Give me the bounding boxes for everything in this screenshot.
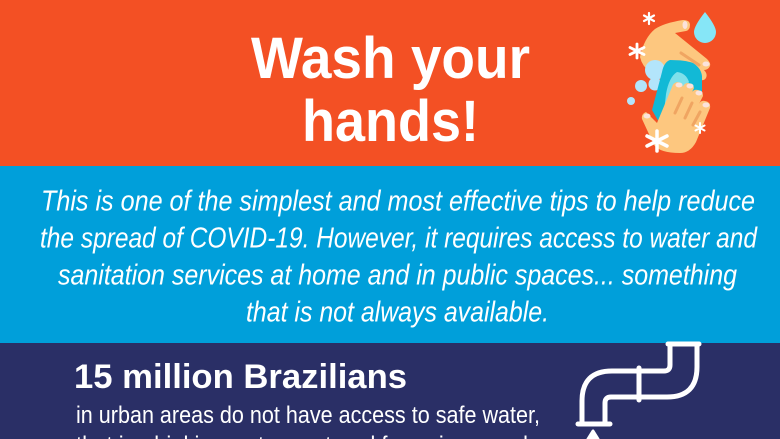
icon: pipe with falling drop <box>578 344 699 439</box>
water drop <box>694 12 716 43</box>
panel: navy statistic <box>0 343 780 439</box>
panel: orange header <box>0 0 780 166</box>
title: hands! <box>302 89 479 154</box>
panel: blue intro <box>0 166 780 343</box>
icon: hands washing with soap <box>627 12 716 153</box>
intro text: that is not always available. <box>246 296 549 328</box>
upper hand <box>640 20 710 80</box>
title <box>251 26 530 154</box>
statistic body text: in urban areas do not have access to safe water, <box>76 402 540 429</box>
statistic body text <box>76 402 540 439</box>
sparkles <box>630 13 704 151</box>
soap bubbles <box>645 60 665 80</box>
lower hand <box>642 82 710 153</box>
intro text <box>40 186 758 328</box>
soap bar <box>652 60 702 124</box>
title: Wash your <box>251 26 530 91</box>
statistic heading: 15 million Brazilians <box>74 358 407 396</box>
